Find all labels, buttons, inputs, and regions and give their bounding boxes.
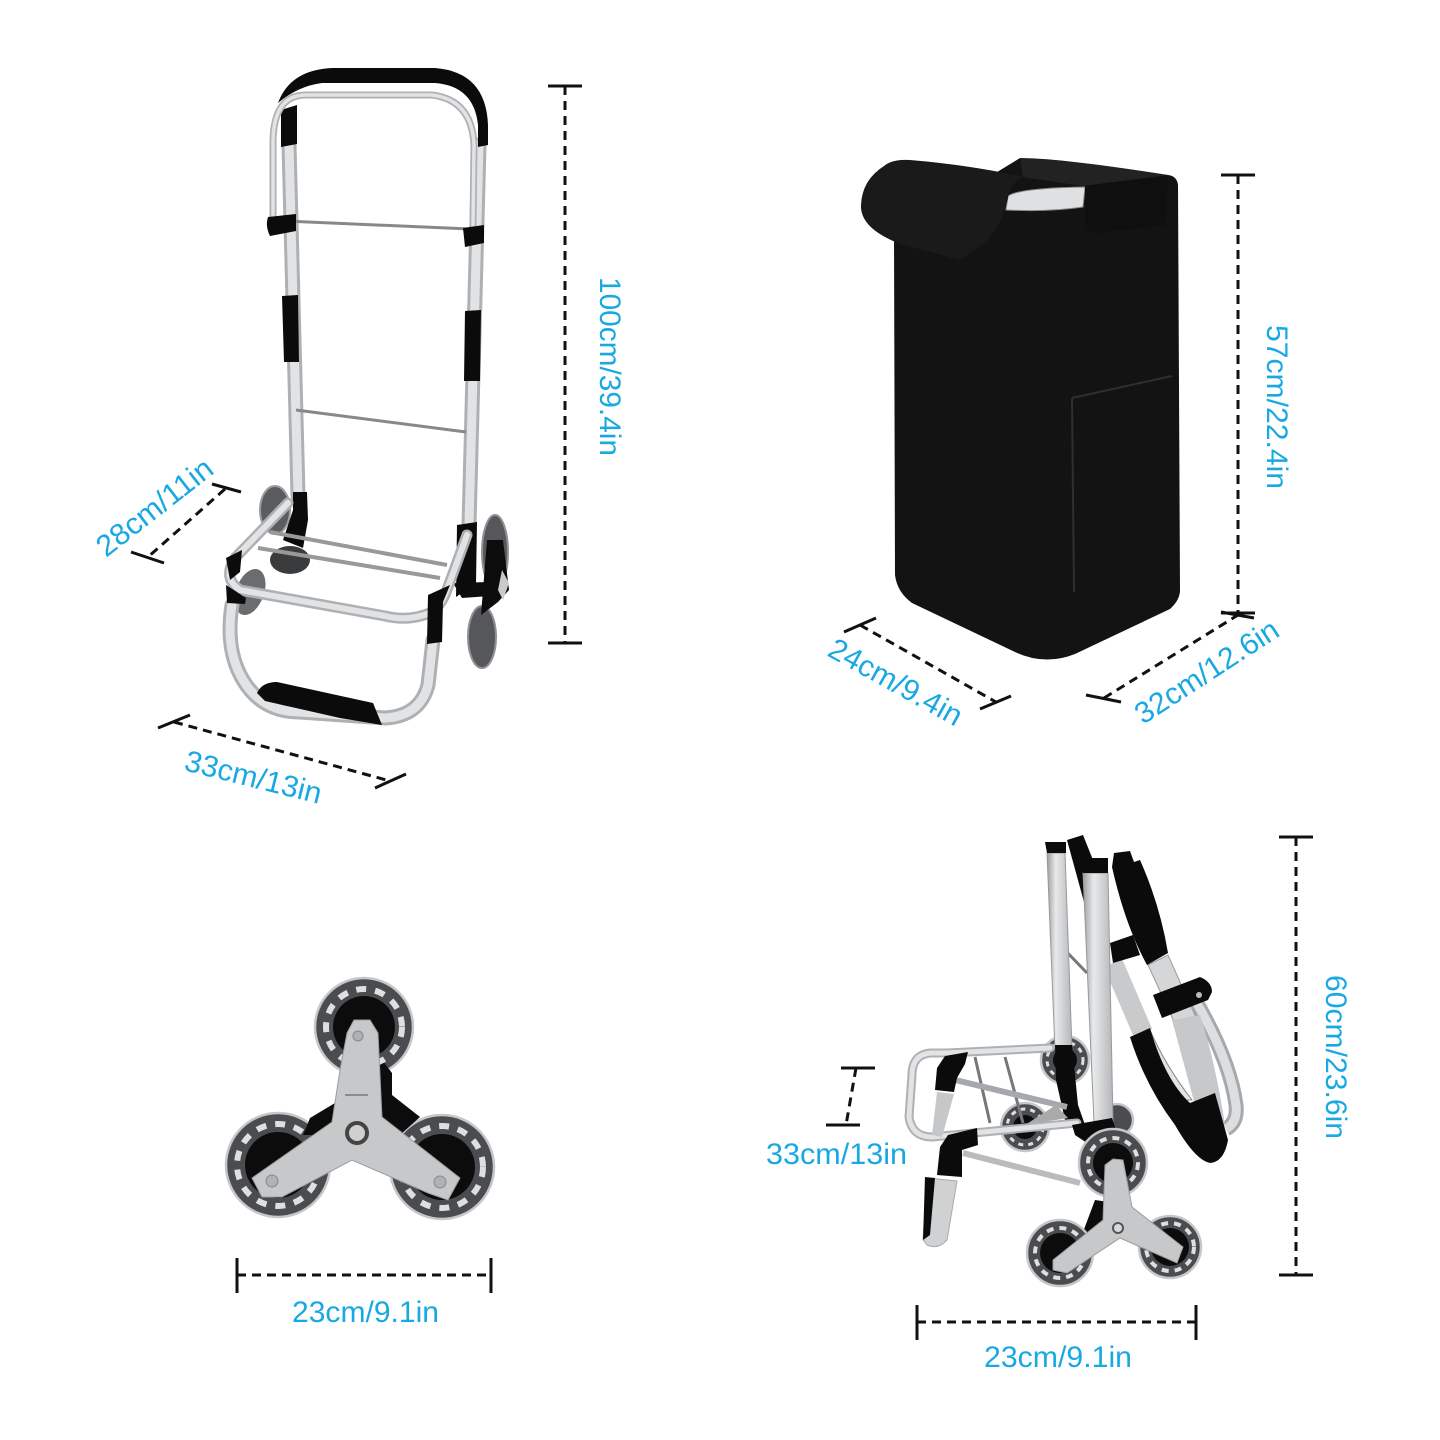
dimension: height 57cm: 57cm/22.4in (1260, 325, 1293, 489)
icon: trolley frame with handle (226, 68, 488, 725)
dimension: wheel width 23cm (237, 1258, 491, 1329)
dimension: wheel width 23cm: 23cm/9.1in (292, 1296, 439, 1329)
dimension: folded depth 33cm: 33cm/13in (766, 1138, 907, 1171)
icon: three-star wheel (226, 978, 494, 1219)
panel: wheel detail (226, 978, 494, 1329)
panel: folded trolley (766, 835, 1352, 1374)
dimension: folded height 60cm (1279, 837, 1352, 1275)
dimension: width 24cm (823, 618, 1011, 733)
dimension: height 57cm (1221, 175, 1293, 613)
dimension: folded width 23cm: 23cm/9.1in (984, 1341, 1132, 1374)
panel: bag (823, 158, 1293, 733)
dimension: folded depth 33cm (766, 1068, 907, 1171)
dimension: width 24cm: 24cm/9.4in (823, 632, 968, 733)
dimension: depth 28cm: 28cm/11in (90, 452, 220, 564)
dimension: folded height 60cm: 60cm/23.6in (1319, 975, 1352, 1139)
dimension: height 100cm: 100cm/39.4in (593, 277, 626, 456)
icon: black storage bag (861, 158, 1180, 660)
icon: stair wheels (229, 486, 509, 668)
panel: assembled trolley (90, 68, 626, 811)
dimension: width 33cm (158, 715, 406, 811)
dimension: height 100cm (548, 86, 626, 643)
icon: folded trolley (909, 835, 1236, 1286)
dimension: depth 32cm: 32cm/12.6in (1129, 613, 1285, 731)
dimension: folded width 23cm (917, 1305, 1196, 1374)
dimension: width 33cm: 33cm/13in (181, 745, 325, 811)
